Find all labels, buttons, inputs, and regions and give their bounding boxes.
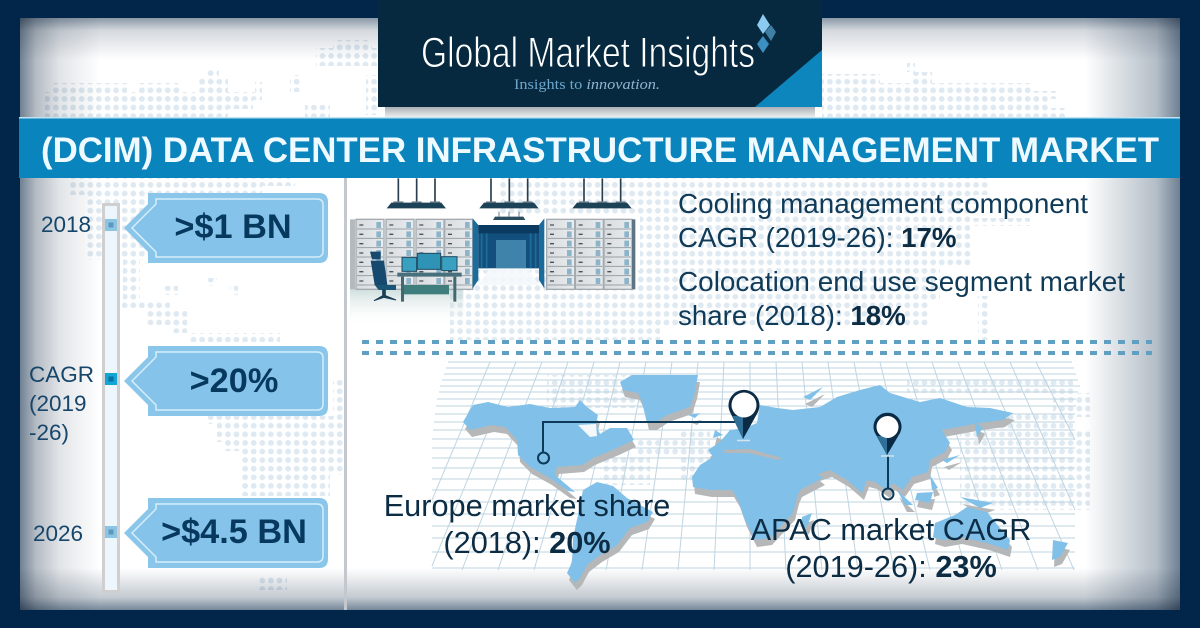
pin connector: Europe — [538, 422, 735, 464]
marker 2018 — [105, 219, 117, 231]
world map — [463, 375, 1070, 590]
logo wordmark: Global Market Insights — [421, 30, 755, 77]
label CAGR: CAGR — [29, 362, 94, 387]
label 2026: 2026 — [33, 521, 83, 546]
text: Europe market share — [384, 488, 670, 560]
text: APAC market CAGR: APAC market CAGR — [751, 512, 1031, 547]
mediterranean detail — [723, 449, 782, 460]
title banner — [19, 117, 1180, 178]
stats: cooling management: Cooling management component — [678, 188, 1088, 219]
stats: cooling CAGR: CAGR (2019-26): 17% — [678, 222, 957, 253]
callout: 2026 value — [124, 498, 328, 568]
timeline labels — [29, 212, 94, 546]
dashed dividers — [362, 342, 1152, 353]
chair — [370, 252, 396, 301]
pin connector: APAC — [882, 456, 894, 500]
logo tagline: Insights to innovation. — [514, 77, 660, 93]
stats: colocation: Colocation end use segment market — [678, 266, 1125, 297]
icon: data center illustration — [350, 178, 635, 326]
pin: Europe — [728, 390, 759, 440]
world map grid — [432, 362, 1080, 570]
callout: CAGR value: >20% — [190, 362, 278, 400]
pin: APAC — [874, 413, 901, 456]
desk with monitors — [397, 253, 462, 302]
dotted world map background — [45, 40, 1090, 590]
callout: 2018 value: >$1 BN — [174, 208, 292, 246]
label CAGR: (2019 — [29, 391, 87, 416]
map land — [463, 375, 1068, 583]
map shadow — [465, 382, 1070, 590]
stats: colocation share: share (2018): 18% — [678, 300, 906, 331]
text: Europe market share: (2018): 20% — [443, 525, 611, 560]
marker CAGR — [105, 373, 117, 385]
text: APAC market CAGR: (2019-26): 23% — [785, 549, 997, 584]
label CAGR: -26) — [29, 420, 69, 445]
logo panel — [378, 0, 822, 118]
timeline bar — [104, 204, 118, 592]
text: APAC market CAGR — [751, 512, 1031, 584]
logo diamonds — [757, 14, 776, 53]
label 2018: 2018 — [41, 212, 91, 237]
title banner: (DCIM) DATA CENTER INFRASTRUCTURE MANAGEMENT MARKET — [41, 131, 1159, 170]
hudson bay detail — [578, 424, 597, 437]
callout: CAGR value — [124, 346, 328, 416]
marker 2026 — [105, 526, 117, 538]
text: Europe market share: Europe market share — [384, 488, 670, 523]
callout: 2026 value: >$4.5 BN — [161, 513, 307, 551]
callout: 2018 value — [124, 193, 328, 263]
